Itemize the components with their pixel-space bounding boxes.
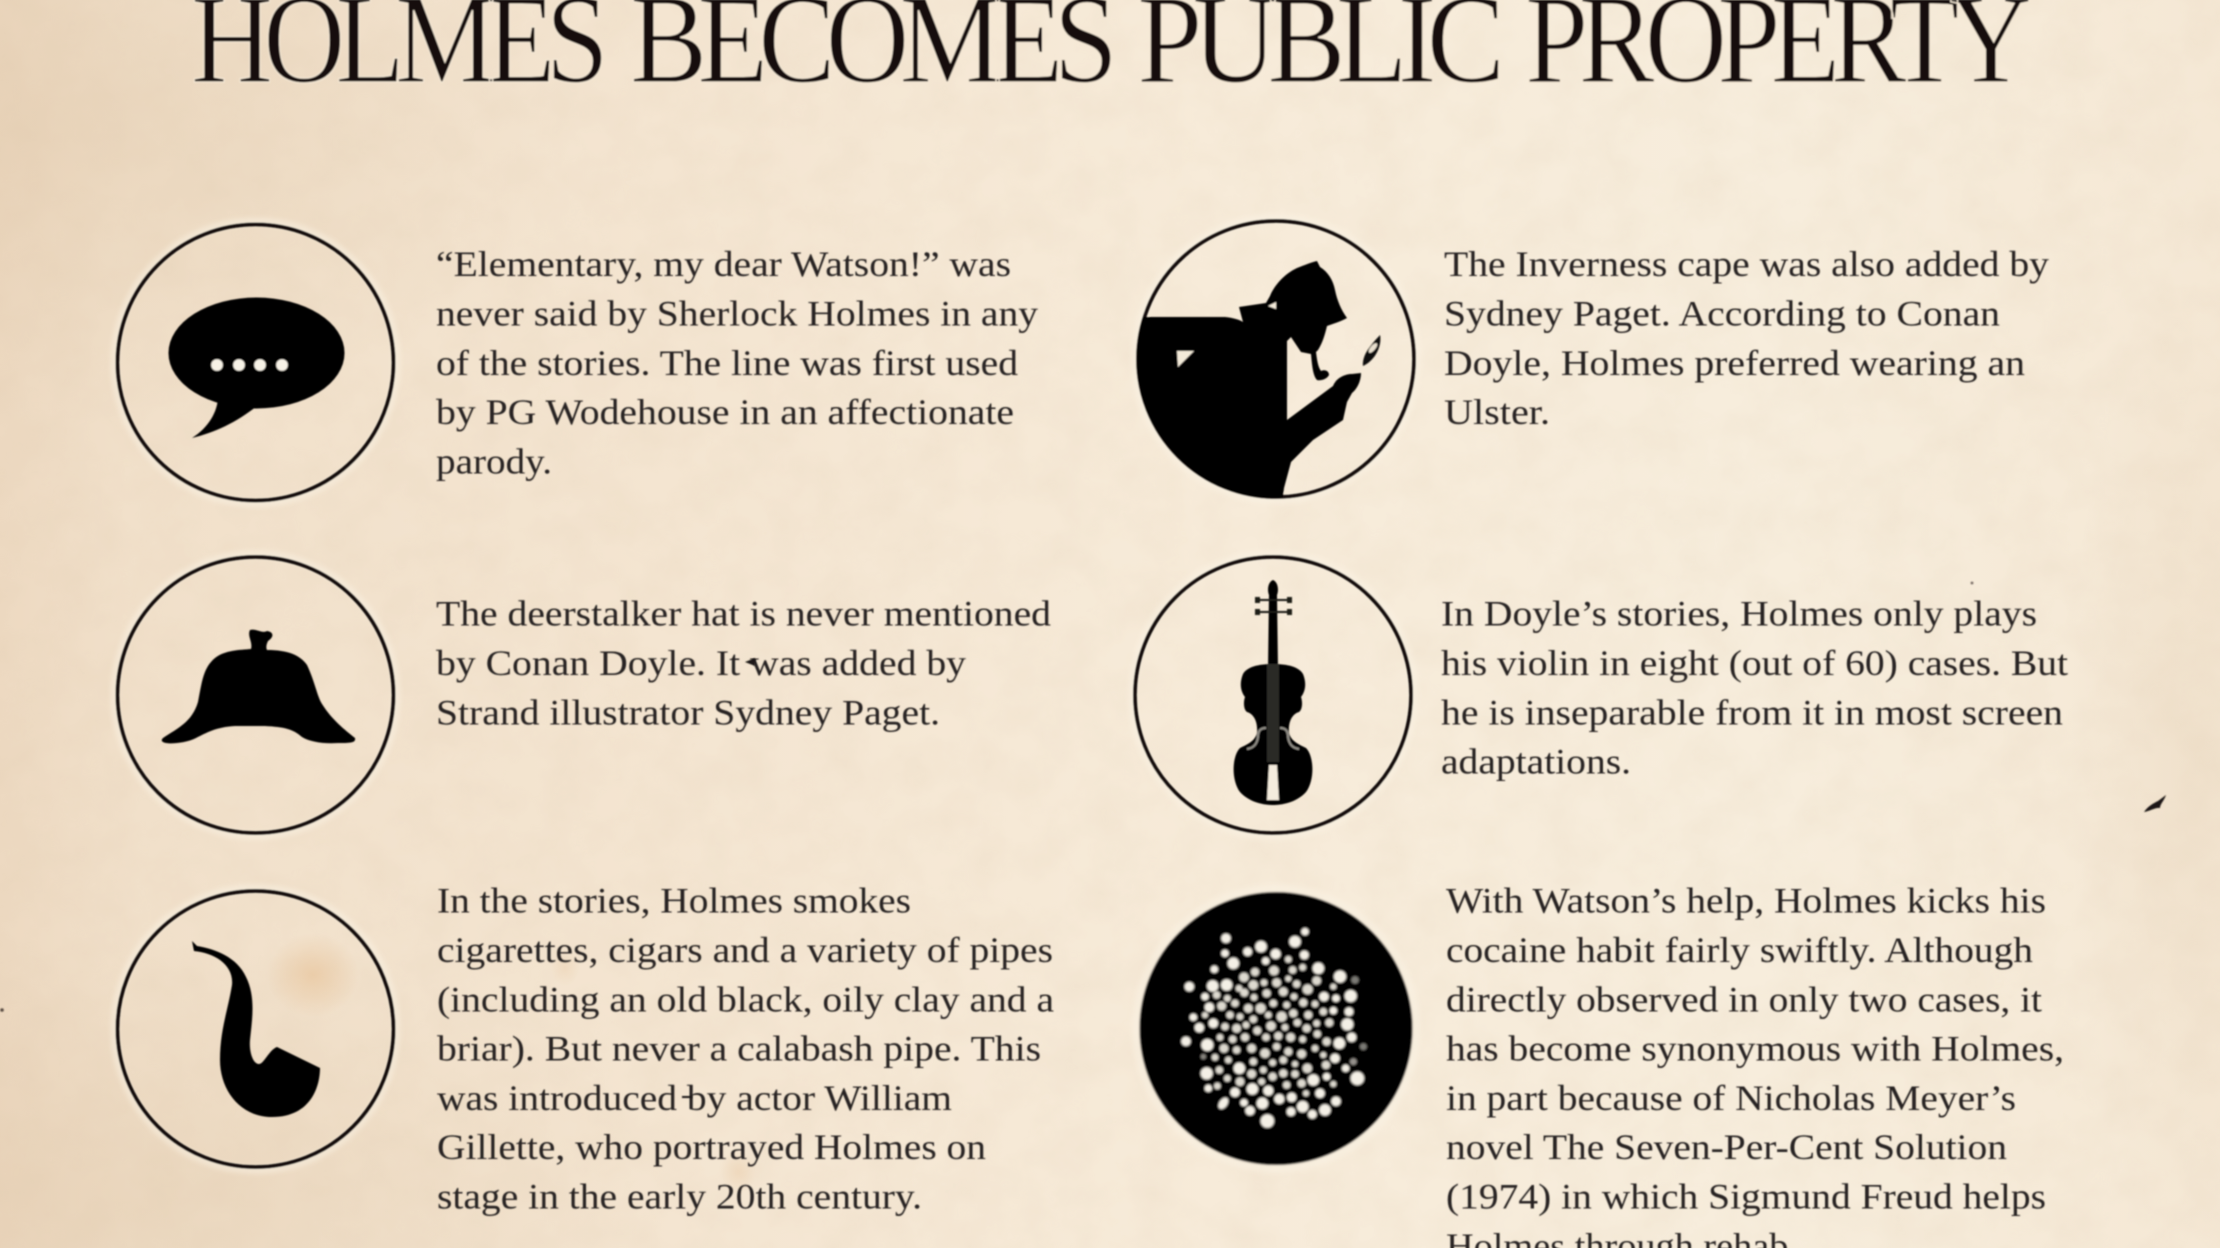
panel: pipe (114, 881, 1054, 1216)
text: elementary quote: of the stories. The line was first used (436, 343, 1018, 383)
panel: inverness cape (1100, 218, 2049, 520)
text: elementary quote (436, 244, 1038, 482)
text: inverness cape (1444, 244, 2049, 432)
text: deerstalker: by Conan Doyle. It was added by (436, 643, 966, 683)
text: pipe: (including an old black, oily clay and a (437, 979, 1054, 1019)
panel: violin (1132, 554, 2068, 836)
text: elementary quote: by PG Wodehouse in an affectionate (436, 392, 1014, 432)
text: pipe: briar). But never a calabash pipe. This (437, 1029, 1041, 1069)
text: cocaine: cocaine habit fairly swiftly. Although (1446, 930, 2033, 970)
ink specks on the paper (0, 582, 2166, 1098)
text: inverness cape: The Inverness cape was also added by (1444, 244, 2049, 284)
text: deerstalker (436, 594, 1051, 732)
text: pipe (437, 881, 1054, 1216)
text: pipe: Gillette, who portrayed Holmes on (437, 1127, 986, 1167)
icon: holmes silhouette (1134, 218, 1417, 500)
title (191, 0, 2029, 110)
text: pipe: In the stories, Holmes smokes (437, 881, 911, 921)
text: deerstalker: Strand illustrator Sydney Paget. (436, 692, 940, 732)
text: violin: his violin in eight (out of 60) cases. But (1441, 643, 2068, 683)
text: cocaine: (1974) in which Sigmund Freud helps (1446, 1176, 2046, 1216)
panel: cocaine (1136, 881, 2064, 1248)
text: inverness cape: Ulster. (1444, 392, 1550, 432)
text: cocaine: directly observed in only two cases, it (1446, 979, 2042, 1019)
text: pipe: cigarettes, cigars and a variety of pipes (437, 930, 1053, 970)
text: elementary quote: never said by Sherlock Holmes in any (436, 293, 1038, 333)
panel: deerstalker (114, 554, 1051, 836)
text: elementary quote: “Elementary, my dear Watson!” was (436, 244, 1011, 284)
icon: pipe (114, 888, 396, 1170)
icon: cocaine particles (1136, 888, 1416, 1168)
text: elementary quote: parody. (436, 442, 552, 482)
text: pipe: was introduced by actor William (437, 1078, 952, 1118)
icon: violin (1132, 554, 1414, 836)
text: cocaine: in part because of Nicholas Meyer’s (1446, 1078, 2016, 1118)
text: cocaine (1446, 881, 2064, 1248)
text: cocaine: novel The Seven-Per-Cent Solution (1446, 1127, 2007, 1167)
text: violin: In Doyle’s stories, Holmes only plays (1441, 594, 2037, 634)
panel: elementary quote (114, 222, 1038, 504)
text: pipe: stage in the early 20th century. (437, 1176, 922, 1216)
text: violin (1441, 594, 2068, 782)
icon: deerstalker hat (114, 554, 396, 836)
text: inverness cape: Sydney Paget. According to Conan (1444, 293, 2000, 333)
text: deerstalker: The deerstalker hat is never mentioned (436, 594, 1051, 634)
text: cocaine: With Watson’s help, Holmes kicks his (1446, 881, 2046, 921)
text: violin: he is inseparable from it in most screen (1441, 692, 2063, 732)
text: inverness cape: Doyle, Holmes preferred wearing an (1444, 343, 2025, 383)
icon: speech bubble (114, 222, 396, 504)
text: violin: adaptations. (1441, 742, 1631, 782)
text: cocaine: has become synonymous with Holmes, (1446, 1029, 2064, 1069)
